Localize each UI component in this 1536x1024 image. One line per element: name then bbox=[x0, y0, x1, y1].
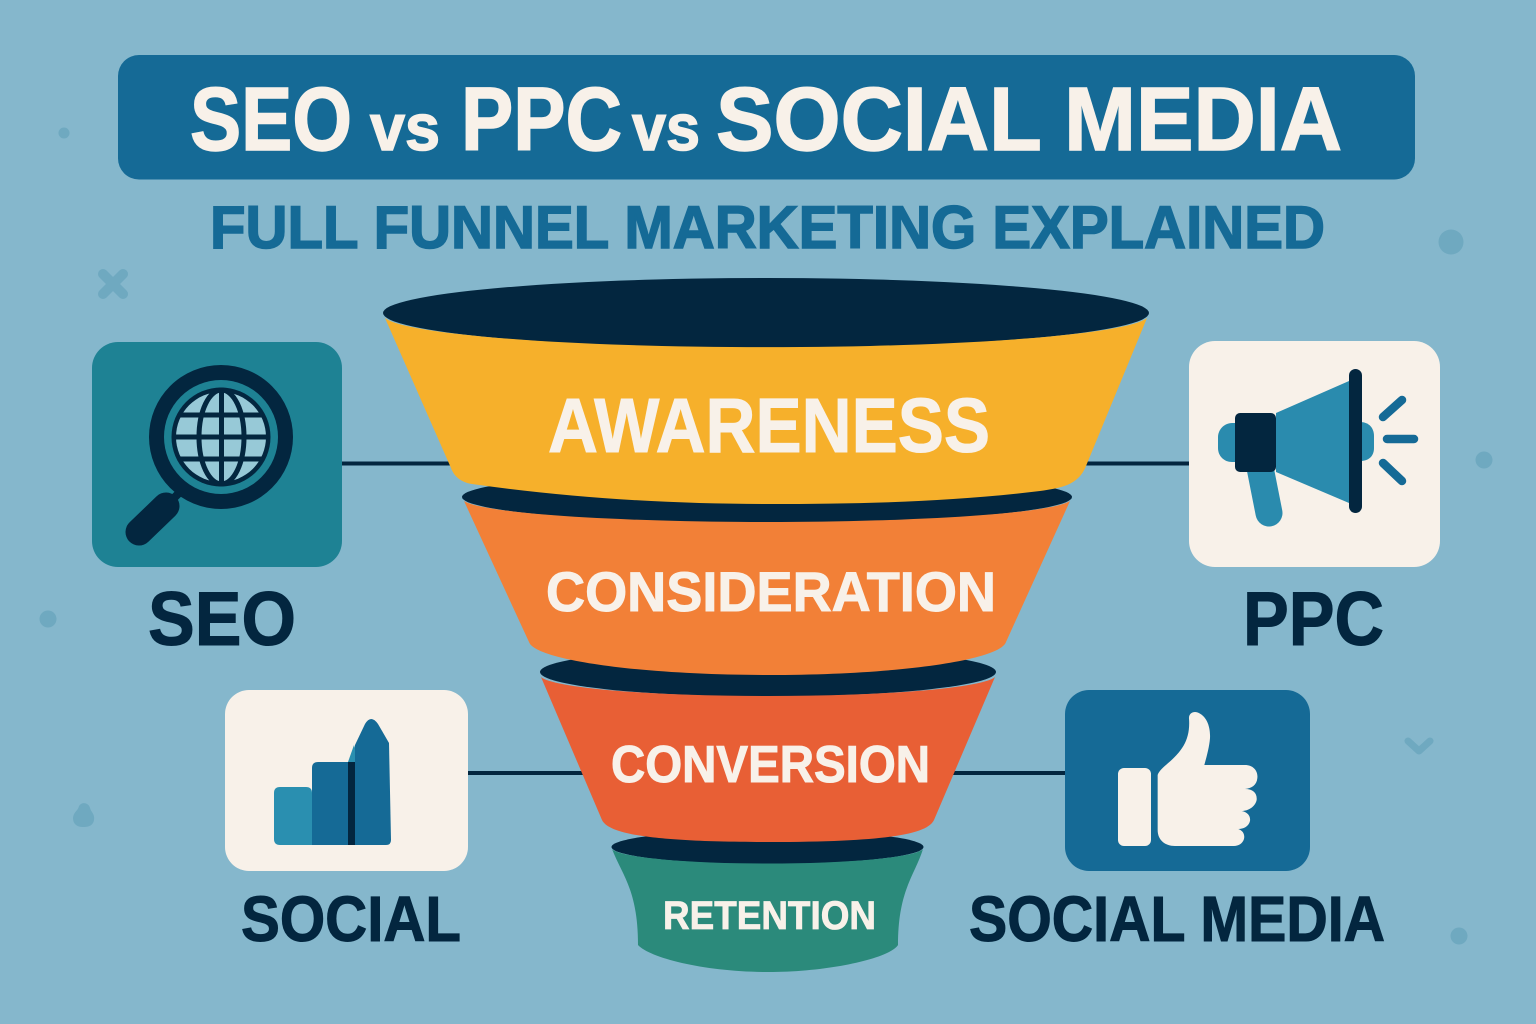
funnel tier: awareness bbox=[383, 278, 1149, 504]
title banner bbox=[118, 55, 1415, 180]
label: Social: SOCIAL bbox=[241, 883, 461, 955]
title text: PPC bbox=[461, 70, 622, 170]
funnel tier: consideration: CONSIDERATION bbox=[546, 560, 996, 623]
panel: Social Media bbox=[1065, 690, 1310, 871]
label: Social Media: SOCIAL MEDIA bbox=[969, 883, 1385, 955]
title text: SEO bbox=[190, 70, 352, 170]
panel: Social bbox=[225, 690, 468, 871]
connector lines bbox=[342, 464, 1190, 773]
title text: vs bbox=[632, 90, 700, 164]
label: SEO: SEO bbox=[148, 577, 296, 662]
title text: SOCIAL MEDIA bbox=[716, 70, 1342, 170]
panel: PPC bbox=[1189, 341, 1440, 567]
panel: SEO bbox=[92, 342, 342, 567]
funnel tier: retention: RETENTION bbox=[663, 894, 876, 938]
funnel bbox=[383, 278, 1149, 972]
icon: thumbs up bbox=[1118, 712, 1257, 846]
subtitle: FULL FUNNEL MARKETING EXPLAINED bbox=[210, 194, 1325, 261]
funnel tier: conversion bbox=[540, 648, 996, 842]
funnel tier: retention bbox=[612, 830, 924, 972]
funnel tier: awareness: AWARENESS bbox=[548, 383, 990, 469]
title text: vs bbox=[370, 90, 440, 164]
title text bbox=[190, 70, 1342, 170]
funnel tier: consideration bbox=[462, 471, 1072, 675]
icon: megaphone bbox=[1218, 369, 1414, 513]
icon: bar chart bbox=[274, 719, 391, 845]
funnel tier: conversion: CONVERSION bbox=[611, 736, 930, 794]
label: PPC: PPC bbox=[1243, 577, 1384, 662]
icon: magnifying glass with globe bbox=[139, 365, 293, 532]
